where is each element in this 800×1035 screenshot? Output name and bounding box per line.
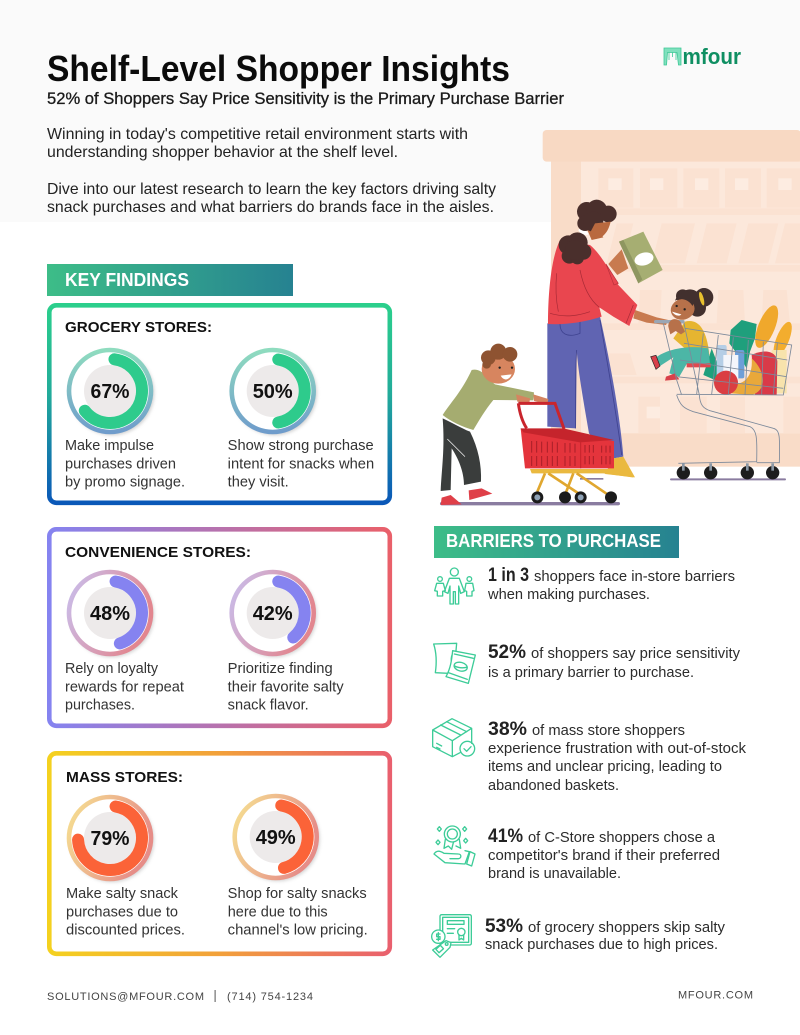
heading: mass stores: MASS STORES: <box>66 769 183 786</box>
icon: shoppers <box>435 568 474 604</box>
text: 53%: 53% <box>485 916 523 937</box>
text: 52%: of shoppers say price sensitivity <box>531 646 741 662</box>
text: 38% <box>488 719 747 794</box>
banner: barriers to purchase <box>434 526 679 558</box>
text: loyalty rewards <box>65 661 184 714</box>
text: discounted prices: discounted prices. <box>66 922 185 938</box>
barrier item: 53% <box>432 915 726 957</box>
icon: box with check <box>433 719 475 757</box>
text: purchase intent: they visit. <box>228 474 289 490</box>
banner: key findings <box>47 264 293 296</box>
text: favorite flavor: their favorite salty <box>228 680 344 696</box>
donut: 67%: 67% <box>90 381 130 403</box>
text: discounted prices: purchases due to <box>66 904 178 920</box>
illustration: store shelf and shopping family <box>440 130 800 505</box>
text: 41%: competitor's brand if their preferred <box>488 848 720 864</box>
donut: 79%: 79% <box>90 828 130 850</box>
barrier item: 52% <box>434 642 741 683</box>
text: 38%: 38% <box>488 719 527 740</box>
text: 41%: 41% <box>488 826 523 847</box>
text: 38%: items and unclear pricing, leading to <box>488 759 722 775</box>
barrier item: 41% <box>434 826 720 882</box>
text: purchase intent: Show strong purchase <box>228 438 374 454</box>
text: loyalty rewards: rewards for repeat <box>65 680 184 696</box>
banner: barriers to purchase: BARRIERS TO PURCHASE <box>446 531 661 551</box>
red basket <box>518 403 634 503</box>
text: 41% <box>488 826 720 882</box>
icon: snack bags <box>434 643 475 683</box>
text: impulse purchases: Make impulse <box>65 438 154 454</box>
banner: key findings: KEY FINDINGS <box>65 270 189 290</box>
footer: website: MFOUR.COM <box>678 990 753 1002</box>
woman <box>547 200 668 477</box>
title: Shelf-Level Shopper Insights <box>47 48 510 89</box>
donut: 50% <box>232 350 317 435</box>
panel: convenience stores <box>49 529 390 726</box>
text: 53%: snack purchases due to high prices. <box>485 937 718 953</box>
shoppers ground shadow <box>440 478 786 505</box>
text: 1 in 3: 1 in 3 <box>488 565 529 586</box>
text: 38%: abandoned baskets. <box>488 778 619 794</box>
panel: mass stores <box>49 753 390 954</box>
donut: 48%: 48% <box>90 603 130 625</box>
text: impulse purchases <box>65 438 185 490</box>
text: 1 in 3 <box>487 565 735 603</box>
text: 52% <box>488 642 741 681</box>
text: low pricing: Shop for salty snacks <box>228 886 367 902</box>
heading: convenience stores: CONVENIENCE STORES: <box>65 544 251 561</box>
donut: 50%: 50% <box>253 381 293 403</box>
intro text: Dive into our latest research to learn the key factors driving salty <box>47 181 496 198</box>
intro text: snack purchases and what barriers do brands face in the aisles. <box>47 199 494 216</box>
text: 1 in 3: when making purchases. <box>487 587 650 603</box>
text: purchase intent <box>228 438 374 490</box>
text: low pricing: channel's low pricing. <box>228 922 368 938</box>
icon: hand with award <box>434 826 475 866</box>
icon: certificate and price tag <box>432 915 471 957</box>
subtitle: 52% of Shoppers Say Price Sensitivity is the Primary Purchase Barrier <box>47 90 564 108</box>
intro text: understanding shopper behavior at the shelf level. <box>47 144 398 161</box>
logo: mfour: mfour <box>682 44 741 69</box>
text: 52%: 52% <box>488 642 526 663</box>
cart wire <box>657 321 792 463</box>
panel: grocery stores <box>49 305 390 503</box>
text: favorite flavor: Prioritize finding <box>228 661 333 677</box>
donut: 67% <box>69 350 154 435</box>
intro text: Winning in today's competitive retail environment starts with <box>47 126 468 143</box>
header background <box>0 0 800 222</box>
text: discounted prices: Make salty snack <box>66 886 179 902</box>
text: loyalty rewards: Rely on loyalty <box>65 661 159 677</box>
donut: 49% <box>235 796 320 881</box>
text: impulse purchases: by promo signage. <box>65 474 185 490</box>
text: favorite flavor: snack flavor. <box>228 698 309 714</box>
barrier item: 1 in 3 <box>435 565 735 604</box>
donut: 48% <box>69 572 154 657</box>
text: favorite flavor <box>228 661 344 714</box>
text: 38%: experience frustration with out-of-stock <box>488 741 747 757</box>
intro text <box>47 126 496 216</box>
heading: grocery stores: GROCERY STORES: <box>65 319 212 336</box>
donut: 42%: 42% <box>253 603 293 625</box>
boy with red basket <box>441 344 634 505</box>
text: 1 in 3: shoppers face in-store barriers <box>534 569 735 585</box>
text: impulse purchases: purchases driven <box>65 456 176 472</box>
text: 38%: of mass store shoppers <box>532 723 685 739</box>
donut: 49%: 49% <box>256 827 296 849</box>
footer: contact details: SOLUTIONS@MFOUR.COM <box>47 991 204 1003</box>
text: purchase intent: intent for snacks when <box>228 456 374 472</box>
text: loyalty rewards: purchases. <box>65 698 135 714</box>
child in shopping cart <box>651 288 796 479</box>
cart produce <box>703 303 796 395</box>
donut: 42% <box>232 572 317 657</box>
text: 53% <box>485 916 726 953</box>
text: 52%: is a primary barrier to purchase. <box>488 665 694 681</box>
text: 53%: of grocery shoppers skip salty <box>528 920 726 936</box>
footer: contact details <box>47 990 313 1003</box>
donut: 79% <box>69 797 154 882</box>
text: low pricing: here due to this <box>228 904 328 920</box>
text: low pricing <box>228 886 368 938</box>
text: discounted prices <box>66 886 185 938</box>
text: 41%: brand is unavailable. <box>488 866 621 882</box>
store shelf <box>543 130 800 467</box>
text: 41%: of C-Store shoppers chose a <box>528 830 716 846</box>
barrier item: 38% <box>433 719 747 794</box>
footer: contact details: (714) 754-1234 <box>227 991 313 1003</box>
